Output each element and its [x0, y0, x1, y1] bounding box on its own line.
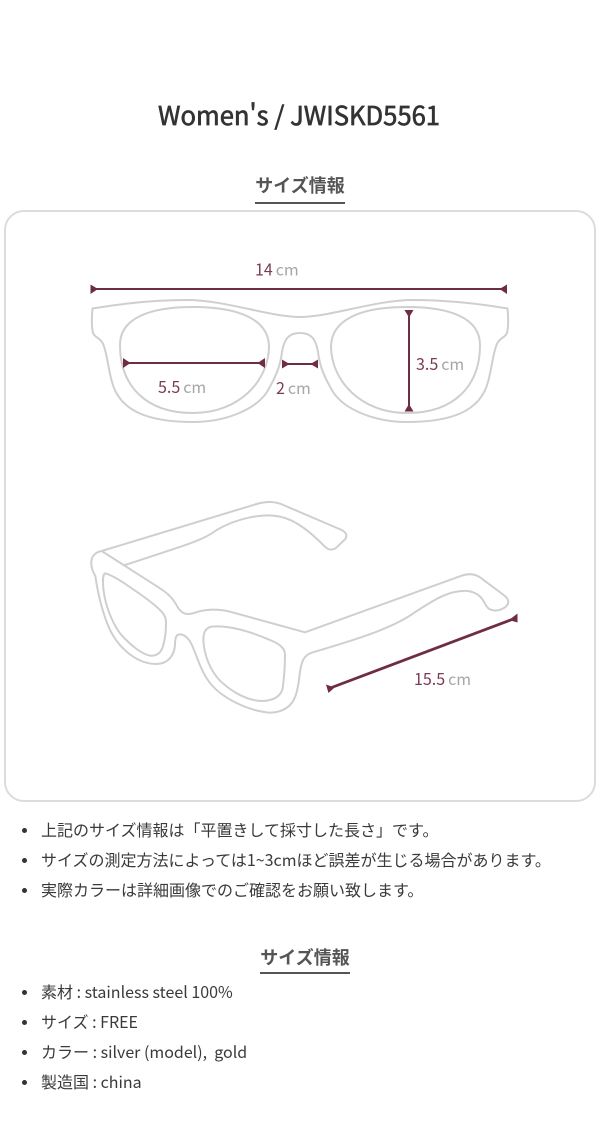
left lens outline: [120, 307, 269, 413]
near-side lens: [103, 573, 166, 656]
label: 5.5 cm: 5.5cm: [158, 374, 206, 398]
country of manufacture: 製造国 : china: [41, 1069, 142, 1093]
heading: size info second: サイズ情報: [260, 944, 350, 970]
note 3: 実際カラーは詳細画像でのご確認をお願い致します。: [41, 877, 423, 901]
label: 15.5 cm: 15.5cm: [414, 666, 471, 690]
front frame outline: [92, 300, 508, 422]
heading: size info: サイズ情報: [255, 172, 345, 198]
diagram: angled view of glasses: [90, 501, 518, 714]
product details list: [22, 979, 247, 1093]
panel: size diagrams: [4, 210, 596, 802]
note 2: サイズの測定方法によっては1~3cmほど誤差が生じる場合があります。: [41, 847, 551, 871]
colour: カラー : silver (model), gold: [41, 1039, 247, 1063]
right lens outline: [331, 307, 480, 413]
label: 3.5 cm: 3.5cm: [416, 351, 464, 375]
arrow: lens width 5.5 cm: [123, 358, 265, 368]
arrow: lens height 3.5 cm: [404, 310, 414, 412]
arrow: bridge width 2 cm: [282, 360, 318, 368]
note 1: 上記のサイズ情報は「平置きして採寸した長さ」です。: [41, 817, 438, 841]
size: サイズ : FREE: [41, 1009, 138, 1033]
arrow: temple length 15.5 cm: [326, 614, 518, 693]
notes list: [22, 817, 551, 901]
label: 14 cm: 14cm: [255, 256, 299, 280]
material: 素材 : stainless steel 100%: [41, 979, 233, 1003]
far temple arm: [102, 502, 346, 565]
title: Women's / JWISKD5561: [158, 96, 440, 133]
arrow: overall width 14 cm: [90, 284, 507, 294]
diagram: front view of glasses: [90, 256, 510, 423]
far-side lens: [203, 626, 285, 701]
label: 2 cm: 2cm: [276, 375, 311, 399]
frame and near temple outline: [91, 551, 508, 713]
